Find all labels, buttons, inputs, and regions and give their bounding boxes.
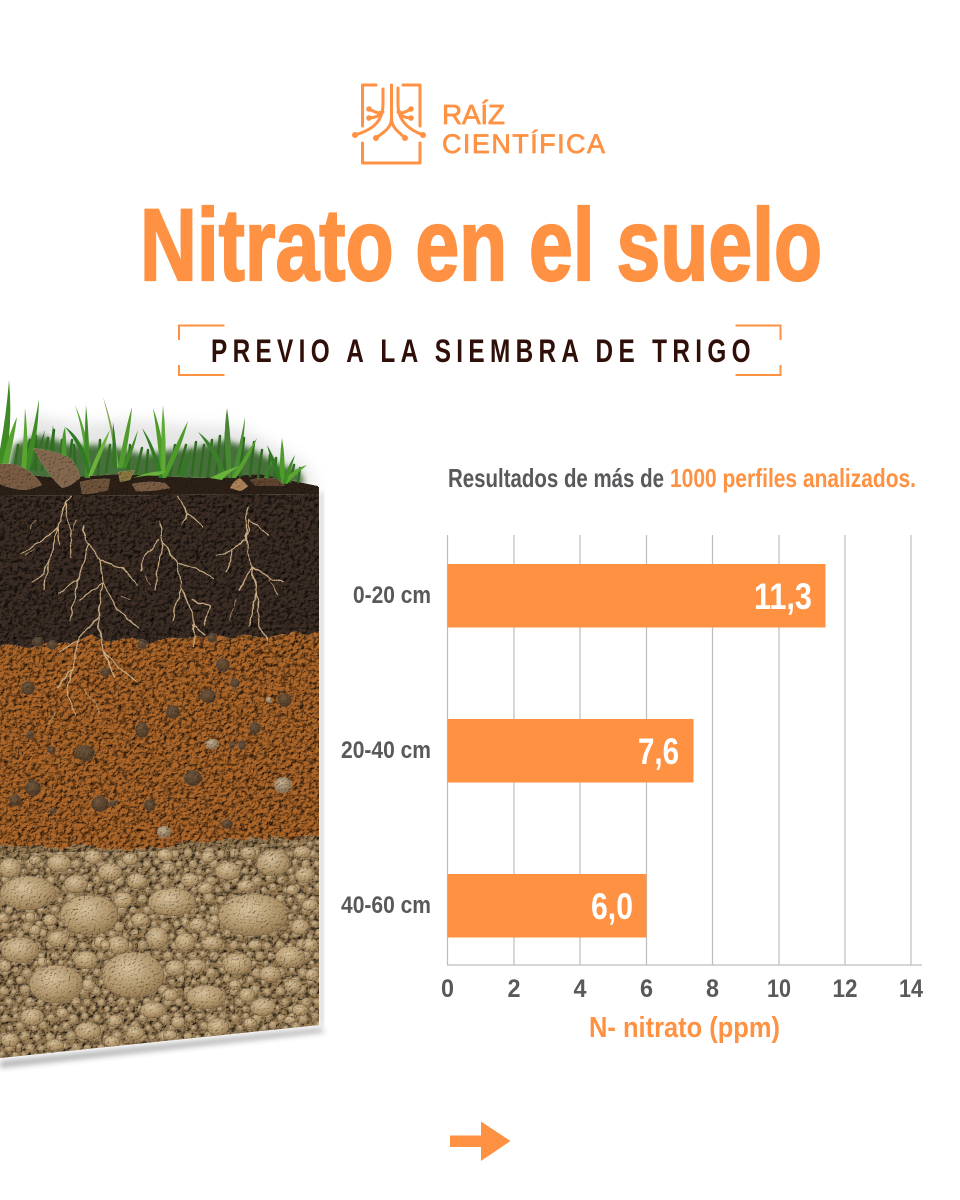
logo wordmark: CIENTÍFICA bbox=[442, 129, 605, 159]
gravel stones bbox=[0, 846, 319, 1051]
block shadow bbox=[0, 415, 326, 1068]
layer: orange-brown subsoil bbox=[0, 630, 319, 852]
grid lines bbox=[447, 535, 922, 965]
x axis tick labels: 12 bbox=[832, 975, 858, 1003]
bar: 20-40 cm: 7,6 bbox=[638, 731, 679, 772]
x axis tick labels: 6 bbox=[640, 975, 653, 1003]
bar chart: N-nitrate by depth bbox=[341, 535, 923, 1044]
x axis tick labels bbox=[441, 975, 923, 1003]
undergrowth mass bbox=[6, 435, 305, 484]
clods in subsoil bbox=[9, 633, 292, 829]
depth labels: 0-20 cm bbox=[353, 582, 431, 609]
logo wordmark bbox=[442, 99, 605, 159]
x axis tick labels: 0 bbox=[441, 975, 454, 1003]
x axis tick labels: 2 bbox=[508, 975, 520, 1003]
bar: 0-20 cm bbox=[448, 564, 826, 628]
icon: root in frame bbox=[352, 85, 426, 163]
depth labels: 20-40 cm bbox=[341, 737, 431, 764]
logo: Raíz Científica bbox=[352, 85, 605, 163]
dense undergrowth bbox=[6, 430, 300, 482]
roots bbox=[21, 495, 282, 725]
x axis title: N- nitrato (ppm) bbox=[589, 1012, 780, 1044]
subtitle with brackets bbox=[179, 326, 780, 375]
arrow: next bbox=[450, 1122, 510, 1161]
ground debris bbox=[0, 472, 318, 496]
x axis tick labels: 8 bbox=[706, 975, 719, 1003]
depth labels: 40-60 cm bbox=[341, 892, 431, 919]
layer: dark topsoil bbox=[0, 487, 319, 648]
bar: 40-60 cm: 6,0 bbox=[591, 886, 633, 927]
grass blades bbox=[0, 380, 307, 484]
layer: pale gravel base bbox=[0, 835, 319, 1058]
bar: 40-60 cm bbox=[448, 874, 646, 938]
fallen leaves bbox=[0, 448, 285, 494]
bar: 20-40 cm bbox=[448, 719, 694, 782]
depth labels bbox=[341, 582, 431, 919]
x axis tick labels: 4 bbox=[574, 975, 587, 1003]
logo wordmark: RAÍZ bbox=[442, 99, 505, 130]
bar: 0-20 cm: 11,3 bbox=[754, 576, 812, 617]
soil layers bbox=[0, 487, 319, 1058]
x axis tick labels: 14 bbox=[899, 975, 923, 1003]
soil profile illustration bbox=[0, 380, 345, 1070]
subtitle with brackets: PREVIO A LA SIEMBRA DE TRIGO bbox=[211, 334, 751, 370]
small gravel fill bbox=[0, 841, 325, 1062]
x axis tick labels: 10 bbox=[767, 975, 791, 1003]
chart intro text: Resultados de más de bbox=[448, 463, 664, 493]
grass and leaf litter bbox=[0, 380, 318, 496]
chart intro text bbox=[448, 463, 916, 493]
